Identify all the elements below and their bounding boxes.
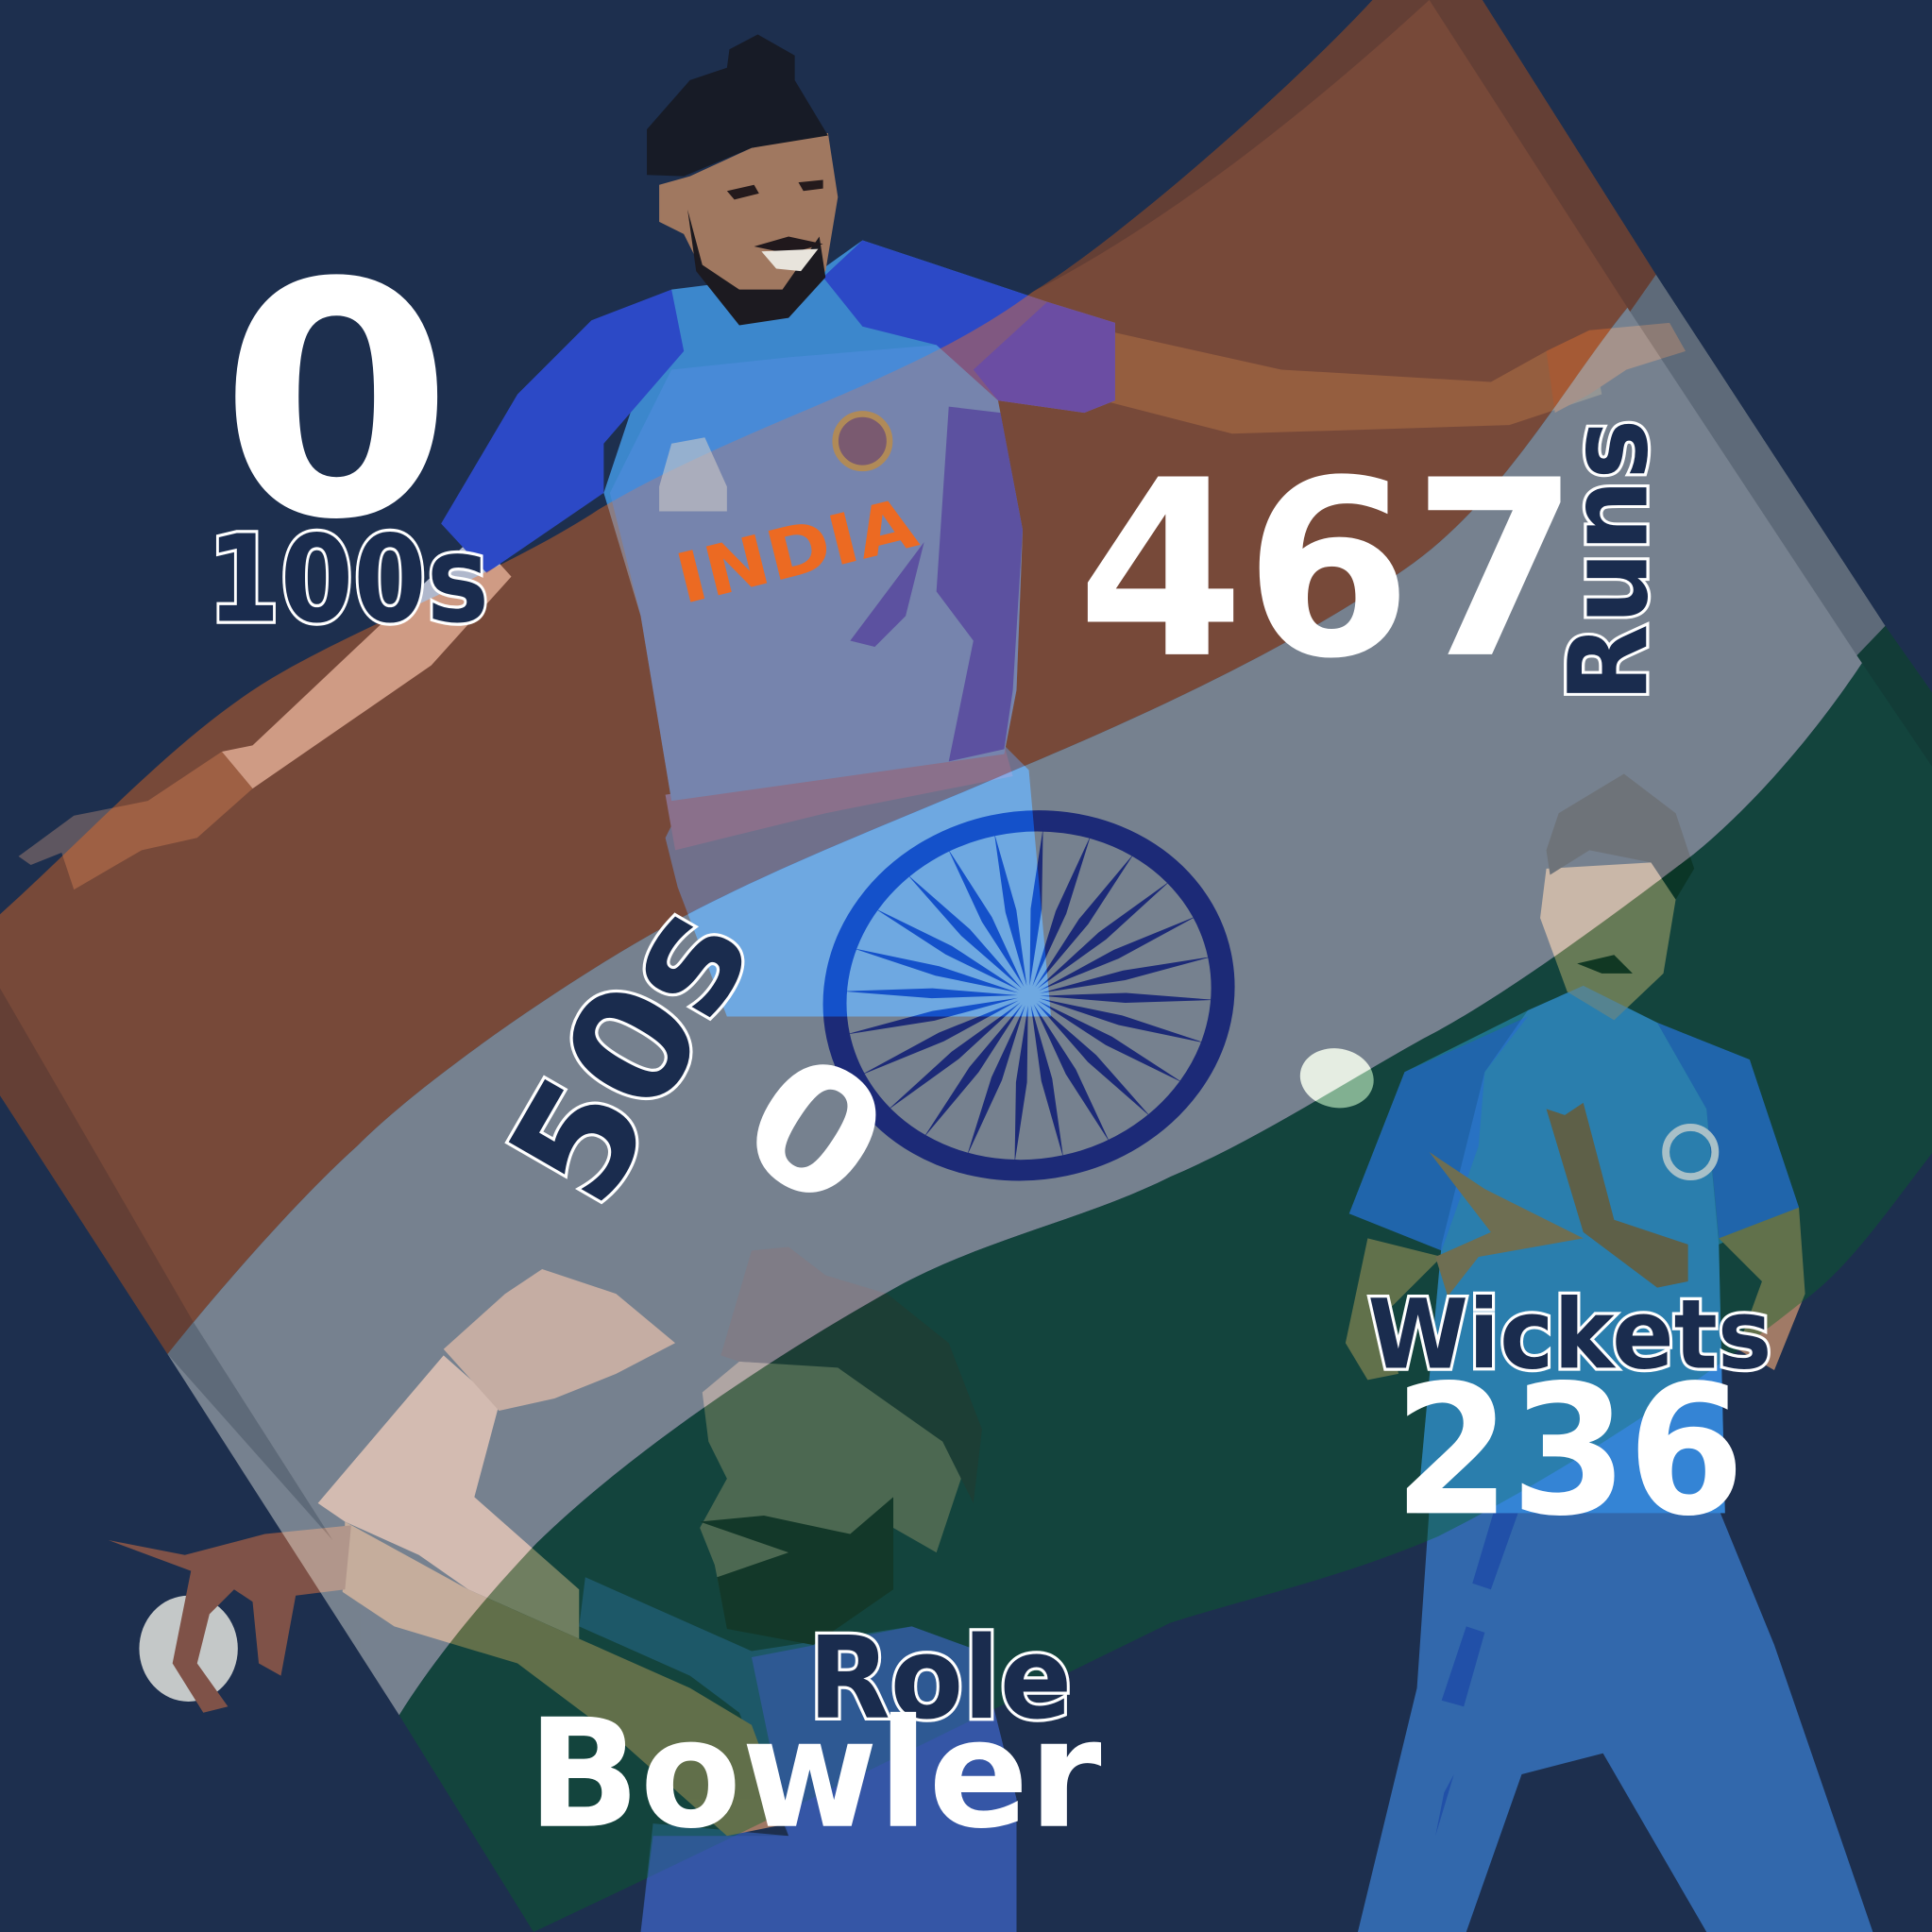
icon: fielder right hand: [1547, 1103, 1688, 1288]
stat: wickets label: Wickets: [1367, 1280, 1771, 1391]
stat: role label: Role: [808, 1614, 1072, 1745]
tint: bowler jersey: [641, 1626, 1016, 1932]
jersey tints and details above the flag: [610, 302, 1799, 1932]
player: celebrating bowler, top centre: [19, 35, 1686, 1016]
flag: white band: [167, 275, 1885, 1715]
stat: runs value: 467: [1076, 428, 1580, 712]
flag: Ashoka Chakra wheel: [802, 785, 1256, 1206]
tint: celebrating bowler side pattern: [850, 407, 1023, 761]
icon: team badge: [836, 414, 890, 468]
flag: green band: [399, 626, 1932, 1932]
icon: fielder team badge: [1666, 1127, 1715, 1177]
tint: celebrating bowler sleeve: [974, 302, 1115, 413]
stat: runs label: Runs: [1546, 419, 1672, 703]
stat: centuries value: 0: [219, 214, 453, 590]
stat: half-centuries label: 50s: [474, 874, 787, 1232]
stat: centuries label: 100s: [207, 510, 489, 651]
tint: fielder torso: [1417, 986, 1725, 1513]
jersey lettering: INDIA: [669, 483, 925, 620]
flag: fold shading: [0, 0, 1932, 1540]
tint: celebrating bowler torso: [610, 345, 1023, 801]
icon: tournament logo: [659, 437, 727, 512]
player: catching fielder, bottom right: [1296, 773, 1873, 1932]
stat: wickets value: 236: [1394, 1346, 1745, 1555]
stat: role value: Bowler: [527, 1686, 1102, 1862]
icon: fielder left hand: [1430, 1152, 1584, 1296]
stat: half-centuries value: 0: [707, 1014, 921, 1249]
tint: fielder sleeves: [1349, 1016, 1799, 1250]
player: bowling action, bottom left: [109, 1247, 1016, 1932]
flag: saffron band: [0, 0, 1656, 1354]
